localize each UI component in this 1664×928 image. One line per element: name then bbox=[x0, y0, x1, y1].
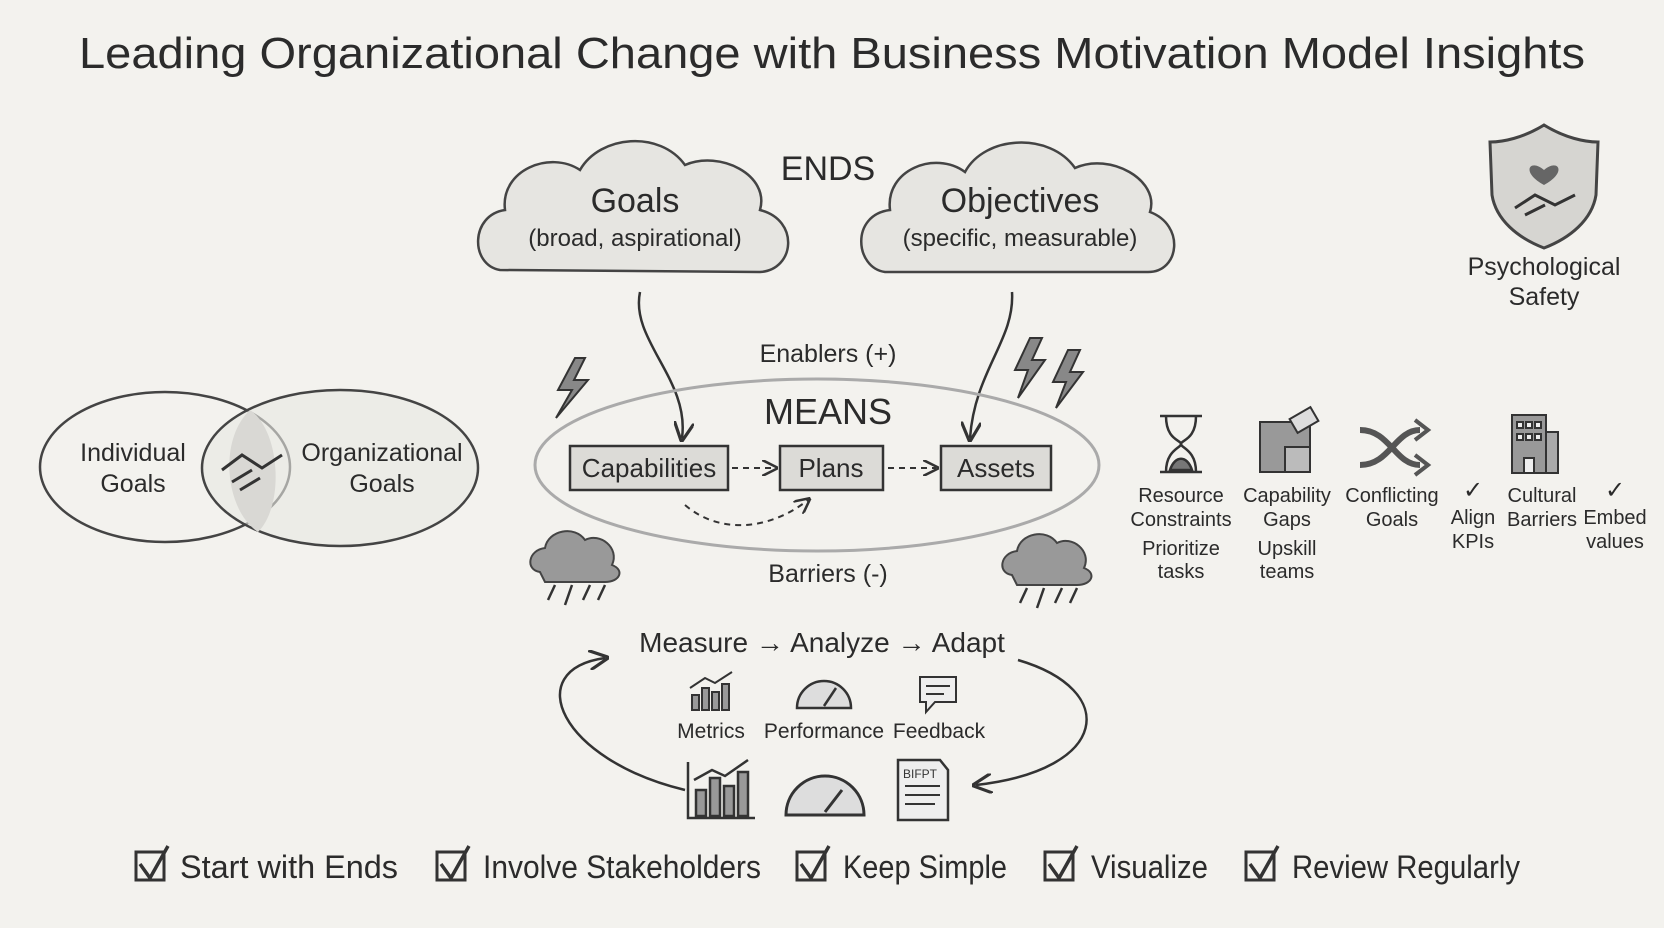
title: Leading Organizational Change with Business Motivation Model Insights bbox=[79, 29, 1585, 78]
icon: shuffle arrows bbox=[1360, 420, 1428, 475]
means ellipse bbox=[535, 379, 1099, 551]
cloud: objectives: Objectives bbox=[941, 182, 1099, 220]
panel: barriers and responses: Goals bbox=[1366, 509, 1418, 531]
panel: barriers and responses: Cultural bbox=[1508, 485, 1576, 507]
icon: storm cloud left bbox=[530, 531, 619, 605]
barriers label: Barriers (-) bbox=[768, 560, 888, 588]
icon: building bbox=[1512, 415, 1558, 473]
box: capabilities bbox=[570, 446, 728, 490]
box: assets: Assets bbox=[957, 453, 1035, 483]
panel: barriers and responses bbox=[1130, 407, 1647, 583]
cloud: objectives: (specific, measurable) bbox=[903, 225, 1137, 252]
arrow: feedback loop left bbox=[560, 658, 685, 790]
arrow: goals to capabilities bbox=[639, 292, 683, 438]
icon: psychological safety shield: Safety bbox=[1509, 283, 1580, 311]
panel: barriers and responses: Upskill bbox=[1258, 538, 1316, 560]
panel: barriers and responses: ✓ bbox=[1463, 477, 1483, 504]
small icons: metrics performance feedback bbox=[677, 672, 986, 743]
checklist bbox=[136, 846, 1520, 885]
small icons: metrics performance feedback: Metrics bbox=[677, 720, 745, 743]
loop heading: measure analyze adapt: Measure → Analyze → Adapt bbox=[639, 627, 1005, 658]
box: plans bbox=[780, 446, 883, 490]
panel: barriers and responses: Constraints bbox=[1130, 509, 1232, 531]
panel: barriers and responses: Conflicting bbox=[1345, 485, 1439, 507]
icon: hourglass bbox=[1160, 416, 1202, 472]
panel: barriers and responses: ✓ bbox=[1605, 477, 1625, 504]
means label: MEANS bbox=[764, 391, 892, 432]
panel: barriers and responses: Align bbox=[1451, 507, 1495, 529]
checklist: Involve Stakeholders bbox=[483, 849, 761, 885]
panel: barriers and responses: teams bbox=[1260, 561, 1314, 583]
box: plans: Plans bbox=[798, 453, 864, 483]
ends label: ENDS bbox=[781, 150, 875, 188]
panel: barriers and responses: tasks bbox=[1158, 561, 1204, 583]
venn: individual vs organizational goals: Goals bbox=[349, 470, 415, 498]
panel: barriers and responses: Barriers bbox=[1507, 509, 1577, 531]
cloud: goals: (broad, aspirational) bbox=[528, 225, 742, 252]
venn: individual vs organizational goals: Individual bbox=[80, 439, 186, 467]
venn: individual vs organizational goals: Goals bbox=[100, 470, 166, 498]
large icons: chart gauge report bbox=[688, 760, 948, 820]
cloud: objectives bbox=[861, 143, 1174, 272]
icon: lightning bolts bbox=[556, 338, 1083, 418]
venn: individual vs organizational goals: Organizational bbox=[301, 439, 463, 467]
checklist: Review Regularly bbox=[1292, 849, 1520, 885]
icon: psychological safety shield: Psychological bbox=[1468, 253, 1620, 281]
panel: barriers and responses: Resource bbox=[1138, 485, 1224, 507]
enablers label: Enablers (+) bbox=[760, 340, 896, 368]
panel: barriers and responses: KPIs bbox=[1452, 531, 1494, 553]
icon: puzzle bbox=[1260, 407, 1318, 472]
panel: barriers and responses: Capability bbox=[1243, 485, 1331, 507]
box: capabilities: Capabilities bbox=[582, 453, 716, 483]
checklist: Keep Simple bbox=[843, 849, 1007, 885]
small icons: metrics performance feedback: Performance bbox=[764, 720, 884, 743]
panel: barriers and responses: Gaps bbox=[1263, 509, 1311, 531]
panel: barriers and responses: Embed bbox=[1583, 507, 1647, 529]
icon: storm cloud right bbox=[1002, 534, 1091, 608]
icon: psychological safety shield bbox=[1468, 125, 1620, 311]
cloud: goals bbox=[478, 141, 788, 272]
venn: individual vs organizational goals bbox=[40, 390, 478, 546]
checklist: Start with Ends bbox=[180, 849, 398, 885]
panel: barriers and responses: Prioritize bbox=[1142, 538, 1220, 560]
large icons: chart gauge report: BIFPT bbox=[903, 767, 938, 781]
arrow: objectives to assets bbox=[970, 292, 1012, 438]
small icons: metrics performance feedback: Feedback bbox=[893, 720, 986, 743]
panel: barriers and responses: values bbox=[1586, 531, 1644, 553]
cloud: goals: Goals bbox=[591, 182, 679, 220]
arrows between means boxes bbox=[685, 468, 936, 525]
checklist: Visualize bbox=[1091, 849, 1208, 885]
arrow: feedback loop right bbox=[976, 660, 1087, 785]
box: assets bbox=[941, 446, 1051, 490]
